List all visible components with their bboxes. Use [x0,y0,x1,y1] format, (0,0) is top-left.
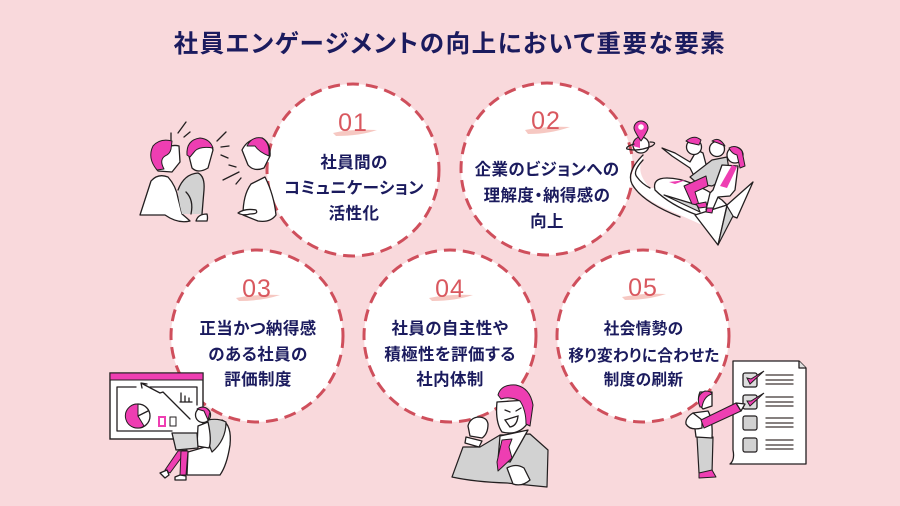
person: grey shirt [178,138,213,221]
person: hoodie [140,140,190,222]
number underline 02 [525,127,570,134]
text 05: 移り変わりに合わせた [568,346,720,365]
rider 2 [684,139,730,208]
text 02: 理解度・納得感の [484,185,610,205]
armchair [187,420,230,475]
bars [159,417,165,426]
title: 社員エンゲージメントの向上において重要な要素 [174,30,726,58]
panel: 05 system renewal [557,250,729,422]
number 03: 03 [242,275,272,303]
pie chart [125,404,150,428]
number underline 05 [622,294,666,300]
hair [498,385,533,426]
head [497,400,527,433]
speech lines [171,122,241,184]
icon: businessman clenching fist [452,385,548,487]
suit [452,434,548,487]
number 05: 05 [628,274,658,302]
text 01: コミュニケーション [284,178,424,198]
checkboxes [743,373,757,387]
face [505,408,521,412]
panel: 01 communication [267,84,439,256]
number 02: 02 [531,107,561,135]
number 04: 04 [435,275,465,303]
pin and planet [627,121,655,153]
text 02: 企業のビジョンへの [475,159,619,179]
text 01: 活性化 [329,204,379,223]
text 03: 正当かつ納得感 [199,318,317,338]
rider 1 [662,137,708,178]
number underline 01 [333,130,377,136]
text 05: 社会情勢の [604,319,683,338]
presentation window [110,373,203,439]
text 02: 向上 [530,212,564,231]
text 05: 制度の刷新 [604,370,683,389]
rider 3 [706,147,745,213]
text 04: 社員の自主性や [391,318,509,338]
trail [631,155,730,224]
analyst [160,407,210,480]
fist [465,437,482,447]
panel: 02 vision [461,83,633,255]
panel: 03 evaluation [171,250,343,422]
text 03: 評価制度 [224,370,292,389]
icon: analyst with chart and laptop [110,373,230,480]
plane [654,178,753,245]
number underline 03 [236,295,280,301]
text 04: 積極性を評価する [384,345,516,364]
text 01: 社員間の [320,153,388,172]
panel: 04 autonomy [364,250,536,422]
person: white shirt [238,138,276,221]
icon: three people talking [140,122,276,222]
person with pencil [686,391,745,478]
number underline 04 [429,295,473,301]
hand [507,466,530,485]
icon: person checking a list [686,361,806,478]
text 04: 社内体制 [416,370,484,389]
icon: people riding paper plane [627,121,753,245]
document [730,361,806,464]
text 03: のある社員の [208,345,308,364]
number 01: 01 [338,109,368,137]
shirt and tie [498,430,528,462]
